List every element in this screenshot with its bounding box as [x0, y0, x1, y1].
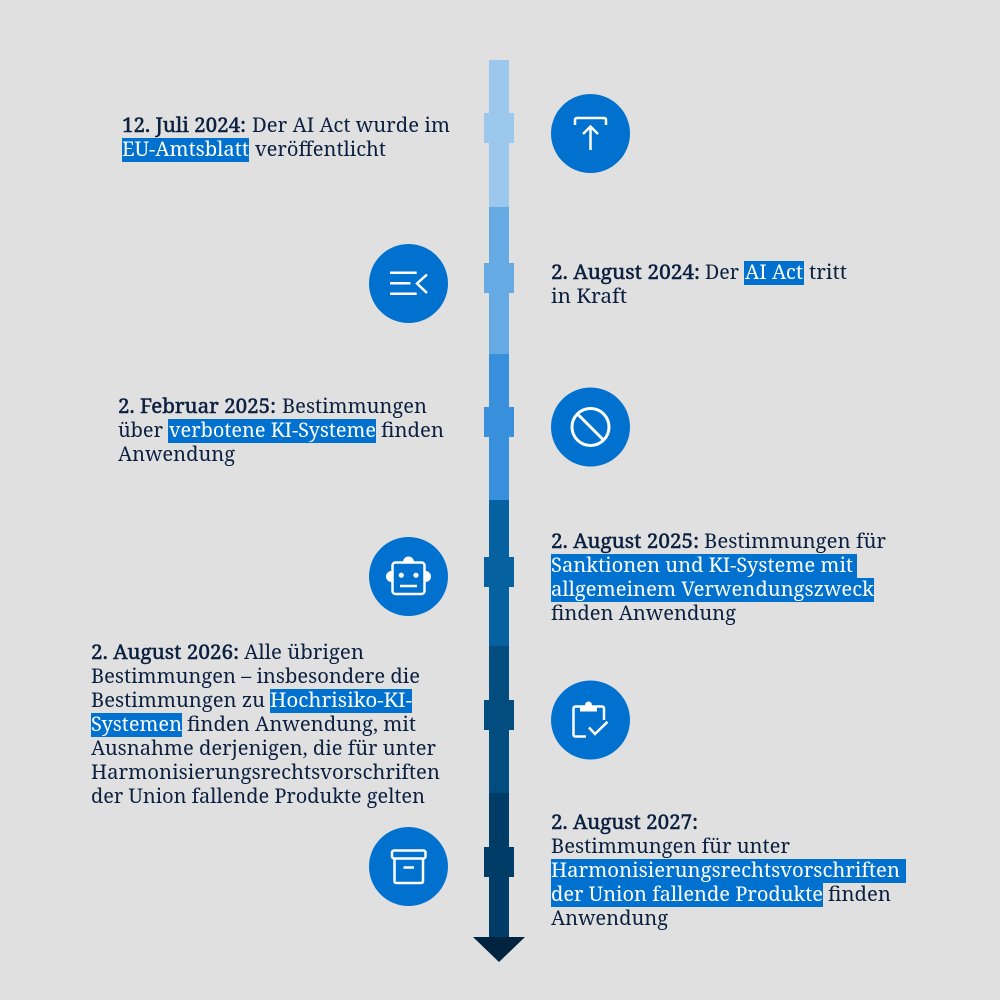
text: 2 August 2024: 2. August 2024: — [551, 258, 700, 285]
text: 2 August 2025 — [551, 527, 887, 626]
text: 2 August 2027: Anwendung — [551, 904, 668, 931]
segment: August 2026 — [484, 646, 514, 793]
text: 12 July 2024 — [122, 111, 450, 162]
segment: August 2027 — [484, 793, 514, 937]
text: 2 August 2025: Sanktionen und KI-Systeme mit — [551, 551, 853, 578]
text: 2 August 2027: finden — [828, 880, 891, 907]
arrowhead — [473, 937, 525, 962]
text: 2 August 2025: 2. August 2025: — [551, 527, 699, 554]
text: 2 August 2026 — [91, 638, 440, 809]
segment: July 2024 — [484, 60, 514, 207]
text: 2 February 2025 — [118, 392, 444, 467]
icon: clipboard check — [551, 680, 630, 760]
text: 2 August 2024: tritt — [809, 258, 847, 285]
text: 2 August 2026: Alle übrigen — [244, 638, 364, 665]
text: 2 August 2026: Bestimmungen – insbesondere die — [91, 662, 420, 689]
text: 2 February 2025: über — [118, 416, 164, 443]
text: 2 August 2027: Harmonisierungsrechtsvorschriften — [551, 856, 900, 883]
text: 2 August 2025: Bestimmungen für — [704, 527, 887, 554]
text: 2 August 2024: Der — [705, 258, 740, 285]
segment: August 2025 — [484, 500, 514, 646]
text: 2 August 2026: Harmonisierungsrechtsvorschriften — [91, 758, 440, 785]
icon: robot — [369, 537, 448, 616]
text: 2 February 2025: Bestimmungen — [282, 392, 427, 419]
text: 2 August 2026: Hochrisiko-KI- — [270, 686, 412, 713]
text: 2 August 2027: 2. August 2027: — [551, 808, 698, 835]
icon: collapse menu — [369, 244, 448, 323]
text: 2 August 2025: allgemeinem Verwendungszweck — [551, 575, 874, 602]
text: 2 August 2027: der Union fallende Produkte — [551, 880, 823, 907]
text: 2 August 2027 — [551, 808, 906, 931]
text: 2 August 2024: AI Act — [745, 258, 803, 285]
text: 2 August 2025: finden Anwendung — [551, 599, 736, 626]
text: 2 February 2025: finden — [381, 416, 444, 443]
text: 2 August 2026: Bestimmungen zu — [91, 686, 265, 713]
text: 2 February 2025: 2. Februar 2025: — [118, 392, 276, 419]
text: 2 August 2027: Bestimmungen für unter — [551, 832, 791, 859]
segment: February 2025 — [484, 354, 514, 500]
text: 2 August 2026: Ausnahme derjenigen, die für unter — [91, 734, 437, 761]
text: 2 February 2025: Anwendung — [118, 440, 235, 467]
icon: prohibited — [551, 388, 630, 466]
text: 2 August 2026: Systemen — [91, 710, 182, 737]
text: 2 August 2026: der Union fallende Produkte gelten — [91, 782, 425, 809]
text: 12 July 2024: veröffentlicht — [255, 135, 386, 162]
text: 2 August 2026: finden Anwendung, mit — [187, 710, 416, 737]
text: 2 August 2024: in Kraft — [551, 282, 627, 309]
text: 12 July 2024: Der AI Act wurde im — [252, 111, 450, 138]
text: 2 February 2025: verbotene KI-Systeme — [169, 416, 376, 443]
text: 2 August 2024 — [551, 258, 847, 309]
text: 12 July 2024: EU-Amtsblatt — [122, 135, 249, 162]
icon: upload — [551, 94, 630, 173]
icon: archive box — [369, 827, 448, 906]
timeline arrow — [473, 60, 525, 962]
text: 12 July 2024: 12. Juli 2024: — [122, 111, 246, 138]
text: 2 August 2026: 2. August 2026: — [91, 638, 239, 665]
segment: August 2024 — [484, 207, 514, 354]
